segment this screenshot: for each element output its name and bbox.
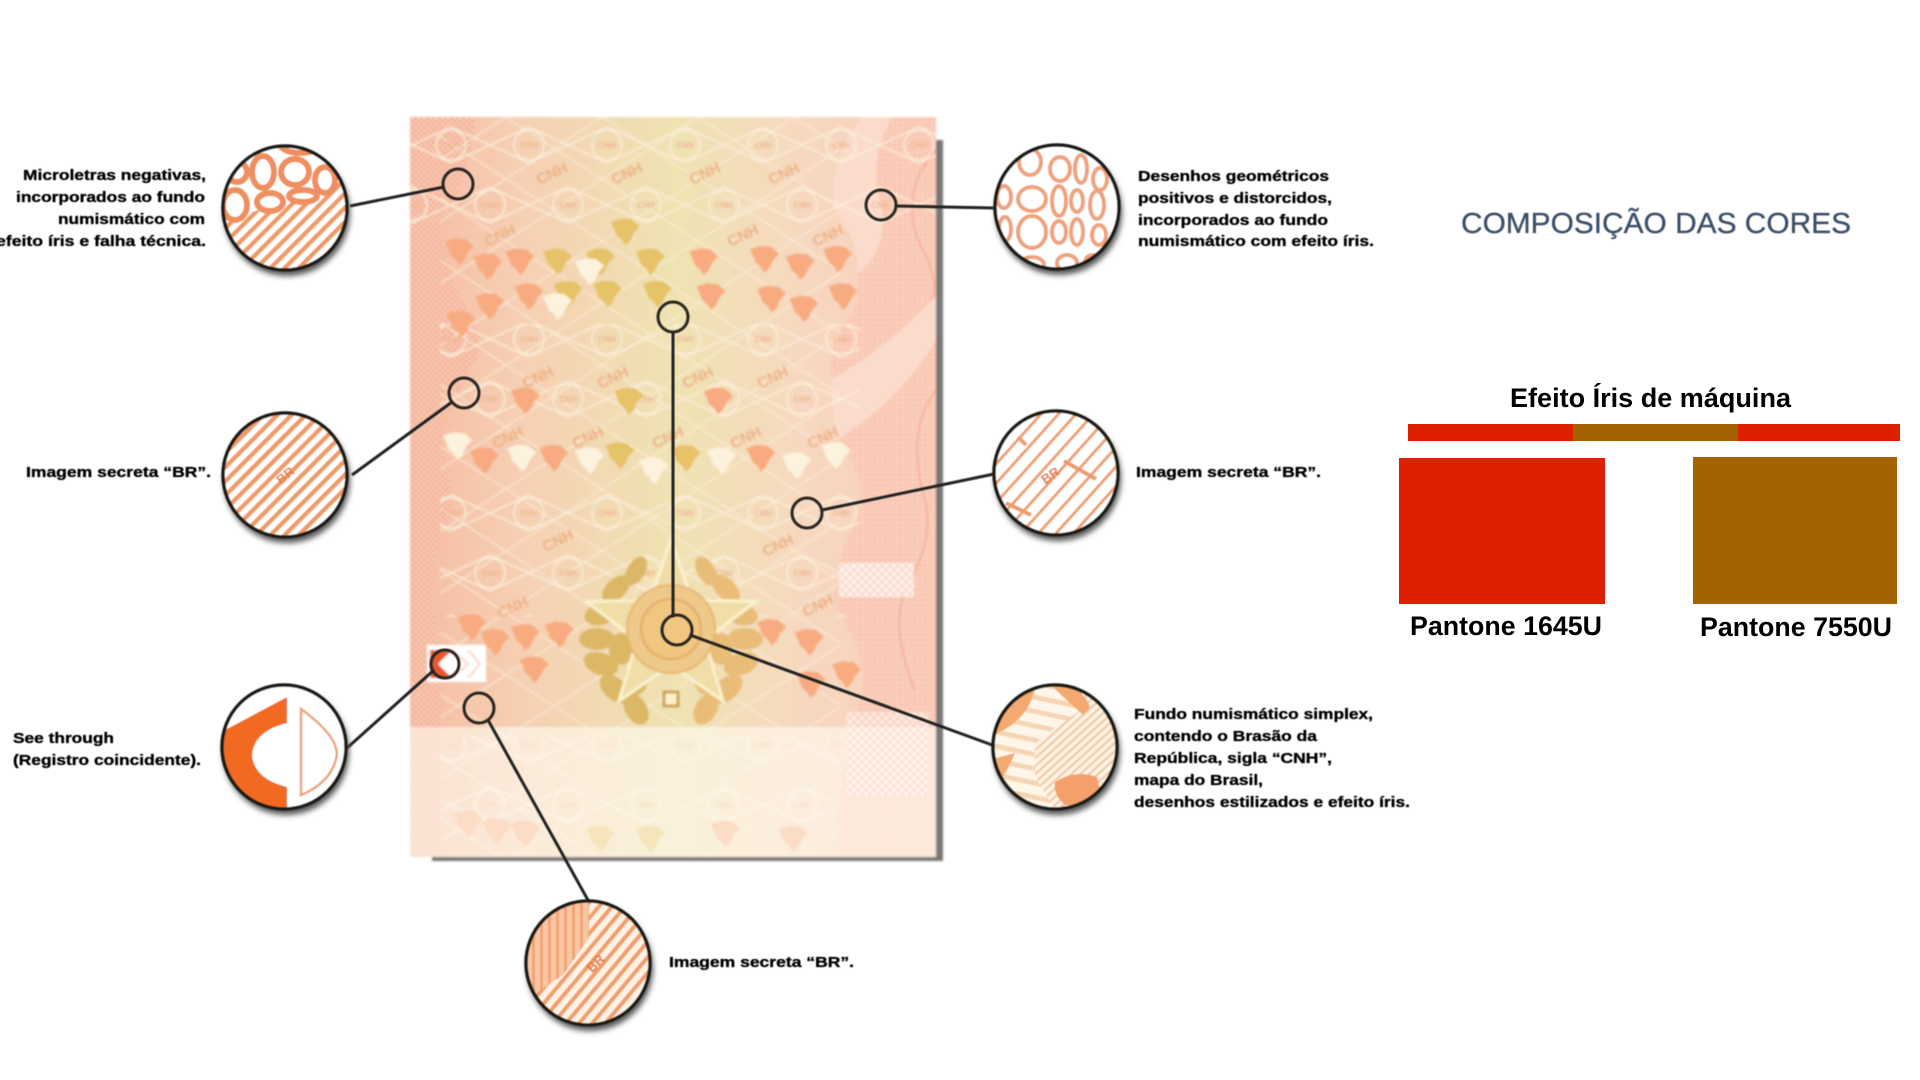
magnifier: fundo numismatico <box>985 677 1125 817</box>
label: desenhos geometricos: numismático com efeito íris. <box>1138 233 1374 250</box>
magnifier: microletras <box>215 135 355 278</box>
diagonal CNH marks: CNH <box>490 423 526 452</box>
see-through window <box>427 645 486 682</box>
magnifier: imagem secreta bottom <box>518 893 658 1033</box>
label: desenhos geometricos: positivos e distorcidos, <box>1138 190 1332 207</box>
label: imagem secreta right: Imagem secreta “BR”. <box>1136 464 1321 481</box>
heading: efeito íris: Efeito Íris de máquina <box>1510 382 1792 413</box>
label: imagem secreta left: Imagem secreta “BR”. <box>26 464 211 481</box>
label: desenhos geometricos: incorporados ao fundo <box>1138 212 1328 229</box>
callout lines <box>347 187 995 902</box>
swatch: pantone 1645U <box>1399 458 1605 641</box>
light ribbon middle <box>832 296 936 438</box>
light ribbon upper <box>833 117 892 274</box>
label: fundo numismatico: contendo o Brasão da <box>1134 728 1318 745</box>
label: see through: (Registro coincidente). <box>13 752 201 769</box>
diagonal CNH marks: CNH <box>687 159 723 188</box>
diagonal CNH marks: CNH <box>805 423 841 452</box>
label: microletras: numismático com <box>58 211 205 228</box>
light bottom band <box>410 727 936 857</box>
diagonal CNH marks: CNH <box>570 423 606 452</box>
document shadow <box>432 140 943 861</box>
label: desenhos geometricos <box>1138 168 1374 250</box>
swatch: pantone 1645U: Pantone 1645U <box>1410 611 1602 641</box>
star <box>586 540 756 701</box>
diagonal CNH marks: CNH <box>766 159 802 188</box>
wave lines <box>899 150 936 690</box>
white check areas <box>839 563 914 597</box>
magnifier: imagem secreta right: BR <box>1038 464 1063 487</box>
diagonal CNH marks: CNH <box>760 531 796 560</box>
diagonal CNH marks: CNH <box>650 423 686 452</box>
left dotted guilloche <box>411 117 480 726</box>
label: microletras: efeito íris e falha técnica. <box>0 233 206 250</box>
label: microletras <box>0 167 206 250</box>
magnifier: imagem secreta left <box>215 405 355 545</box>
locator circles <box>431 169 896 723</box>
diagonal CNH marks: CNH <box>810 221 846 250</box>
label: microletras: Microletras negativas, <box>23 167 206 184</box>
magnifier: imagem secreta bottom: BR <box>583 951 608 975</box>
label: see through: See through <box>13 730 114 747</box>
magnifier: see through <box>212 675 354 819</box>
diagonal CNH marks: CNH <box>800 591 836 620</box>
diagonal CNH marks: CNH <box>534 159 570 188</box>
map of Brazil marks <box>443 218 861 852</box>
label: fundo numismatico: Fundo numismático simplex, <box>1134 706 1373 723</box>
diagonal CNH marks: CNH <box>755 363 791 392</box>
diagonal CNH marks: CNH <box>540 526 576 555</box>
right wave band <box>832 120 900 712</box>
iris gradient bar <box>1408 424 1900 441</box>
title: composição das cores: COMPOSIÇÃO DAS CORES <box>1461 206 1851 240</box>
CNH emblem rows <box>410 125 936 830</box>
diagonal CNH marks: CNH <box>725 221 761 250</box>
magnifier: imagem secreta right <box>986 403 1126 543</box>
label: fundo numismatico: mapa do Brasil, <box>1134 772 1263 789</box>
magnifier: desenhos geometricos <box>987 137 1127 277</box>
CNH document background <box>410 117 943 861</box>
diagonal CNH marks: CNH <box>680 363 716 392</box>
diagonal CNH marks: CNH <box>609 159 645 188</box>
wreath <box>579 553 763 729</box>
label: imagem secreta bottom: Imagem secreta “BR”. <box>669 954 854 971</box>
label: desenhos geometricos: Desenhos geométricos <box>1138 168 1329 185</box>
diagonal CNH marks: CNH <box>728 423 764 452</box>
label: see through <box>13 730 201 769</box>
label: microletras: incorporados ao fundo <box>16 189 205 206</box>
diagonal CNH marks <box>482 159 846 622</box>
label: fundo numismatico: desenhos estilizados e efeito íris. <box>1134 794 1410 811</box>
diagonal CNH marks: CNH <box>495 593 531 622</box>
swatch: pantone 7550U: Pantone 7550U <box>1700 612 1892 642</box>
label: fundo numismatico <box>1134 706 1410 811</box>
diagonal CNH marks: CNH <box>520 363 556 392</box>
document sheet <box>410 117 936 857</box>
diagonal CNH marks: CNH <box>482 221 518 250</box>
seal <box>627 585 715 673</box>
magnifier: imagem secreta left: BR <box>273 463 298 487</box>
swatch: pantone 7550U <box>1693 457 1897 642</box>
guilloche lattice <box>440 117 840 857</box>
sword base <box>664 692 678 706</box>
coat of arms <box>579 540 763 729</box>
label: fundo numismatico: República, sigla “CNH”, <box>1134 750 1332 767</box>
diagonal CNH marks: CNH <box>595 363 631 392</box>
